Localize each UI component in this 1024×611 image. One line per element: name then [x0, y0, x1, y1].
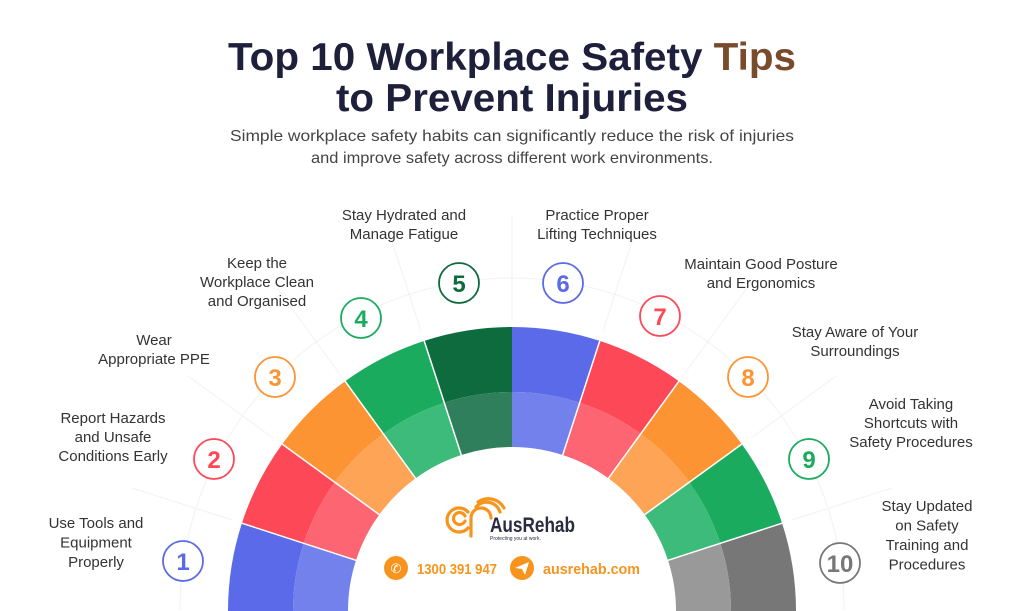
label 1: Properly	[68, 554, 124, 571]
tip labels	[49, 207, 973, 574]
logo: AusRehab	[447, 499, 575, 542]
label 4: Workplace Clean	[200, 274, 314, 291]
segment 5	[424, 327, 512, 455]
number 2: 2	[207, 447, 221, 474]
label 9: Safety Procedures	[849, 434, 973, 451]
number 1: 1	[176, 549, 190, 576]
label 10: Training and	[886, 537, 968, 554]
logo: AusRehab: Protecting you at work.	[490, 536, 541, 542]
label 9: Avoid Taking	[869, 396, 953, 413]
label 5: Manage Fatigue	[350, 226, 458, 243]
number 6	[543, 263, 583, 303]
subtitle: and improve safety across different work environments.	[311, 150, 713, 167]
label 7: Maintain Good Posture	[684, 256, 838, 273]
label 10: Procedures	[889, 556, 965, 574]
number 5: 5	[452, 271, 466, 298]
number 9: 9	[802, 447, 816, 474]
label 10: on Safety	[895, 518, 959, 534]
icon: logo mark	[447, 499, 504, 536]
label 5: Stay Hydrated and	[342, 207, 466, 224]
contact: website	[510, 556, 640, 580]
segment 3	[282, 381, 416, 515]
number 4	[341, 298, 381, 338]
number 8	[728, 357, 768, 397]
label 3: Appropriate PPE	[98, 351, 210, 368]
contact: phone	[384, 556, 497, 580]
contact: phone: 1300 391 947	[417, 561, 497, 578]
label 3: Wear	[136, 332, 172, 349]
number circles	[163, 263, 860, 583]
logo: AusRehab: AusRehab	[490, 514, 575, 537]
faint guide lines	[132, 215, 892, 610]
label 2: Conditions Early	[58, 448, 168, 465]
segment 9	[645, 444, 782, 560]
segment 6	[512, 327, 600, 455]
title	[228, 36, 796, 120]
number 6: 6	[556, 271, 570, 298]
label 6: Lifting Techniques	[537, 226, 657, 243]
title: Top 10 Workplace Safety Tips	[228, 36, 796, 79]
label 4: Keep the	[227, 255, 287, 272]
number 10: 10	[827, 551, 853, 578]
contact: website: ausrehab.com	[543, 561, 640, 578]
number 3	[255, 357, 295, 397]
label 1: Use Tools and	[49, 515, 143, 532]
label 6: Practice Proper	[545, 207, 649, 224]
label 8: Stay Aware of Your	[792, 324, 918, 341]
segment 1	[228, 523, 356, 611]
number 2	[194, 439, 234, 479]
number 7: 7	[653, 304, 667, 331]
label 1: Equipment	[60, 534, 133, 552]
number 10	[820, 543, 860, 583]
number 4: 4	[354, 306, 368, 333]
number 9	[789, 439, 829, 479]
number 1	[163, 541, 203, 581]
label 2: Report Hazards	[60, 410, 166, 427]
label 10: Stay Updated	[882, 498, 972, 515]
label 7: and Ergonomics	[707, 275, 815, 292]
segment 4	[345, 341, 461, 478]
number 7	[640, 296, 680, 336]
subtitle	[230, 128, 794, 167]
title: to Prevent Injuries	[336, 77, 688, 120]
segment 2	[242, 444, 379, 560]
segment 8	[608, 381, 742, 515]
contact: phone: ✆	[391, 561, 402, 576]
number 3: 3	[268, 365, 282, 392]
segment 10	[668, 523, 796, 611]
label 4: and Organised	[208, 293, 306, 310]
semicircle chart	[228, 327, 796, 611]
label 9: Shortcuts with	[864, 415, 958, 432]
subtitle: Simple workplace safety habits can significantly reduce the risk of injuries	[230, 128, 794, 145]
label 2: and Unsafe	[75, 429, 151, 446]
number 8: 8	[741, 365, 755, 392]
segment 7	[563, 341, 679, 478]
number 5	[439, 263, 479, 303]
label 8: Surroundings	[810, 343, 900, 360]
